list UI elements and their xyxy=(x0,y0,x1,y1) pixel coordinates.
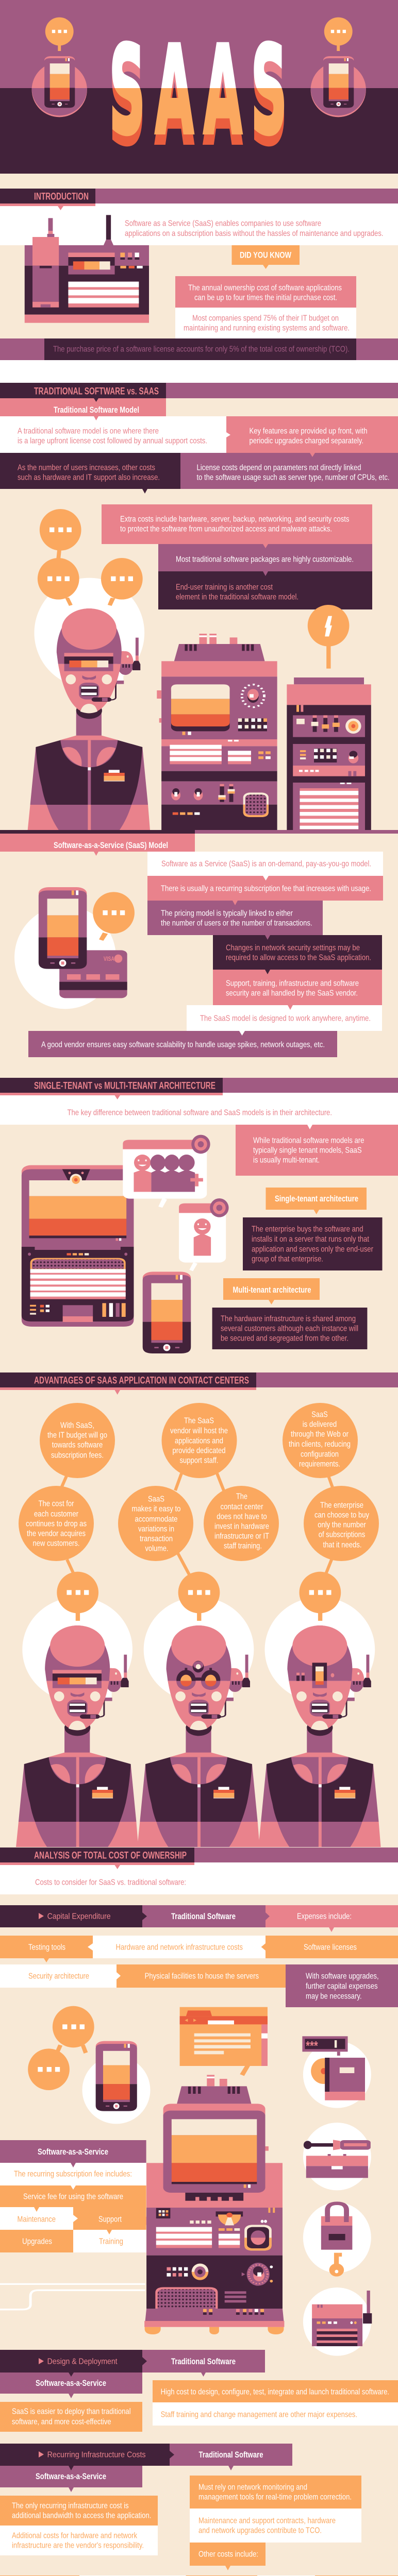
panel: recurring saas: Additional costs for hardware and network xyxy=(12,2532,138,2540)
subheading: traditional software model xyxy=(0,398,166,416)
advantage bubble 6: does not have to xyxy=(217,1513,267,1521)
label: multi-tenant architecture: Multi-tenant architecture xyxy=(233,1285,311,1295)
advantage bubble 1: With SaaS, xyxy=(60,1421,94,1430)
row: recurring infrastructure headers xyxy=(0,2444,292,2470)
section header: total cost of ownership: ANALYSIS OF TOTAL COST OF OWNERSHIP xyxy=(34,1851,187,1861)
icon: padlock and key xyxy=(303,2202,371,2277)
panel: design saas: Software-as-a-Service xyxy=(36,2378,106,2388)
intro line: costs to consider: Costs to consider for SaaS vs. traditional software: xyxy=(35,1878,186,1887)
illustration: three contact-center agents xyxy=(16,1572,381,1847)
text panel: extra costs: Extra costs include hardware, server, backup, networking, and security costs xyxy=(120,515,350,523)
panel: design saas: software, and more cost-effective xyxy=(12,2417,111,2427)
row: design and deployment headers: Traditional Software xyxy=(171,2357,236,2366)
step: network security xyxy=(213,935,382,970)
advantage bubble 6: contact center xyxy=(221,1502,263,1512)
text panel: key features: periodic upgrades charged separately. xyxy=(250,437,363,445)
text panel: other costs xyxy=(0,453,180,494)
step: scalability xyxy=(28,1031,337,1057)
row: security and facilities: Physical facilities to house the servers xyxy=(145,1972,259,1980)
icon: right phone with speech bubble xyxy=(311,18,366,117)
panel: design saas: SaaS is easier to deploy than traditional xyxy=(12,2407,131,2416)
advantage bubble 4: the vendor acquires xyxy=(27,1529,86,1538)
advantage bubble 7: only the number xyxy=(318,1521,366,1529)
advantage bubble 4 xyxy=(19,1486,94,1561)
title: SAAS xyxy=(109,31,287,172)
text panel: customizable: Most traditional software packages are highly customizable. xyxy=(176,555,354,564)
text panel: single-tenant: application and serves only the end-user xyxy=(252,1245,374,1254)
section header: traditional software vs saas xyxy=(0,383,398,398)
row: recurring infrastructure headers: Recurring Infrastructure Costs xyxy=(47,2450,146,2460)
panel: recurring traditional: management tools for real-time problem correction. xyxy=(198,2493,352,2502)
icon: tenant phone xyxy=(143,1272,191,1353)
advantage bubble 3: requirements. xyxy=(299,1460,340,1468)
advantage bubble 5: SaaS xyxy=(148,1495,164,1503)
panel: recurring traditional xyxy=(190,2476,361,2570)
advantage bubble 1: subscription fees. xyxy=(51,1451,104,1460)
advantage bubble 4: new customers. xyxy=(33,1539,79,1548)
text panel: single-tenant: group of that enterprise. xyxy=(252,1255,323,1263)
advantage bubble 3 xyxy=(283,1403,358,1478)
illustration: factory machine xyxy=(25,215,149,323)
panel: saas recurring fee: The recurring subscription fee includes: xyxy=(14,2170,132,2178)
advantage bubble 3: configuration xyxy=(301,1450,339,1459)
advantage bubble 5: variations in xyxy=(138,1525,174,1533)
section header: advantages xyxy=(0,1372,398,1395)
advantage bubble 2: support staff. xyxy=(179,1456,219,1465)
step: recurring fee xyxy=(147,876,383,901)
advantage bubble 5 xyxy=(118,1486,193,1561)
panel: saas recurring fee xyxy=(0,2140,146,2252)
step: pricing model: the number of users or the number of transactions. xyxy=(161,919,312,927)
row: capital expenditure headers: Traditional Software xyxy=(171,1911,236,1921)
icon: left phone with speech bubble xyxy=(32,18,87,117)
subheading: traditional software model: Traditional Software Model xyxy=(54,405,139,415)
label: multi-tenant architecture xyxy=(223,1278,320,1304)
advantage bubble 4: each customer xyxy=(34,1510,79,1519)
step: pricing model xyxy=(147,901,323,935)
panel: recurring saas: Software-as-a-Service xyxy=(36,2471,106,2481)
advantage bubble 7: can choose to buy xyxy=(314,1511,369,1520)
advantage bubble 7: The enterprise xyxy=(320,1501,363,1510)
icon: single-tenant window xyxy=(179,1198,229,1271)
fact: IT budget: maintaining and running existing systems and software. xyxy=(184,324,350,333)
text panel: traditional definition xyxy=(0,416,226,453)
text panel: software upgrades xyxy=(286,1964,398,2007)
floor line xyxy=(0,830,398,834)
panel: recurring traditional: Must rely on network monitoring and xyxy=(198,2483,307,2492)
section header: single vs multi tenant: SINGLE-TENANT vs MULTI-TENANT ARCHITECTURE xyxy=(34,1081,215,1091)
text panel: training xyxy=(158,571,372,609)
text panel: multi-tenant xyxy=(212,1308,367,1349)
advantage bubble 6: invest in hardware xyxy=(214,1522,269,1531)
text panel: multi-tenant note: typically single tenant models, SaaS xyxy=(253,1146,362,1155)
text panel: single-tenant: installs it on a server that runs only that xyxy=(252,1235,369,1244)
advantage bubble 2: The SaaS xyxy=(184,1417,214,1425)
text panel: software upgrades: With software upgrades, xyxy=(306,1972,379,1980)
panel: recurring saas: additional bandwidth to access the application. xyxy=(12,2511,151,2520)
panel: design traditional: Staff training and change management are other major expenses. xyxy=(161,2410,357,2419)
text panel: multi-tenant note xyxy=(236,1125,398,1176)
text panel: multi-tenant: be secured and segregated from the other. xyxy=(221,1334,349,1343)
subheading: saas model: Software-as-a-Service (SaaS) Model xyxy=(54,840,168,850)
advantage bubble 5: volume. xyxy=(145,1545,168,1553)
callout: did you know: DID YOU KNOW xyxy=(240,250,292,260)
text panel: extra costs xyxy=(102,504,372,544)
panel: design traditional xyxy=(153,2380,398,2426)
label: single-tenant architecture: Single-tenant architecture xyxy=(275,1194,358,1204)
text panel: single-tenant xyxy=(243,1217,383,1270)
step: support: security are all handled by the SaaS vendor. xyxy=(226,989,358,997)
row: capital expenditure headers xyxy=(0,1905,398,1932)
advantage bubble 1 xyxy=(40,1403,115,1478)
advantage bubble 2 xyxy=(162,1403,237,1478)
panel: saas recurring fee: Upgrades xyxy=(22,2237,52,2246)
text panel: other costs: such as hardware and IT support also increase. xyxy=(18,473,160,482)
advantage bubble 6 xyxy=(204,1486,279,1561)
advantage bubble 3: thin clients, reducing xyxy=(289,1440,351,1449)
panel: design saas xyxy=(0,2372,142,2432)
text panel: software upgrades: may be necessary. xyxy=(306,1992,362,2001)
step: support: Support, training, infrastructure and software xyxy=(226,979,359,988)
illustration: server rack with power bubble xyxy=(287,605,371,830)
fact: purchase price band xyxy=(0,338,398,360)
row: capital expense items: Software licenses xyxy=(304,1943,357,1952)
advantage bubble 2: applications and xyxy=(175,1436,223,1446)
text panel: multi-tenant: The hardware infrastructure is shared among xyxy=(221,1315,356,1323)
fact: annual ownership cost: The annual ownership cost of software applications xyxy=(188,283,342,293)
password characters: *** xyxy=(306,2039,318,2053)
illustration: tablet device xyxy=(22,1165,134,1327)
illustration: central mainframe xyxy=(0,2075,284,2334)
text panel: license costs xyxy=(180,453,398,489)
panel: saas recurring fee: Service fee for using the software xyxy=(23,2193,123,2201)
text panel: other costs: As the number of users increases, other costs xyxy=(18,464,155,472)
title: SAAS xyxy=(109,21,287,161)
fact: IT budget xyxy=(175,308,356,338)
text panel: key features xyxy=(226,416,398,457)
section header: total cost of ownership xyxy=(0,1848,398,1894)
panel: recurring saas: The only recurring infrastructure cost is xyxy=(12,2502,129,2510)
advantage bubble 2: vendor will host the xyxy=(170,1427,228,1435)
panel: recurring traditional: Maintenance and support contracts, hardware xyxy=(198,2516,336,2526)
fact: annual ownership cost: can be up to four times the initial purchase cost. xyxy=(194,294,337,302)
advantage bubble 4: The cost for xyxy=(38,1499,74,1509)
subheading: saas model xyxy=(0,834,195,856)
icon: multi-tenant window xyxy=(123,1135,210,1208)
row: capital expense items: Testing tools xyxy=(28,1943,65,1952)
agent 1: visor xyxy=(16,1572,138,1847)
agent 3: mini screen xyxy=(258,1572,381,1847)
row: capital expense items xyxy=(0,1936,398,1962)
panel: recurring saas xyxy=(0,2466,158,2555)
row: security and facilities: Security architecture xyxy=(28,1972,89,1980)
fact: annual ownership cost xyxy=(175,276,356,308)
panel: saas recurring fee: Training xyxy=(99,2237,123,2246)
intro text: Software as a Service (SaaS) enables companies to use software xyxy=(125,219,321,228)
section header: introduction xyxy=(0,189,398,245)
text panel: software upgrades: further capital expenses xyxy=(306,1982,378,1991)
step: anywhere xyxy=(187,1005,382,1031)
text panel: multi-tenant note: is usually multi-tenant. xyxy=(253,1156,320,1164)
step: pricing model: The pricing model is typically linked to either xyxy=(161,909,293,918)
advantage bubble 7: of subscriptions xyxy=(319,1530,365,1539)
panel: recurring traditional: and network upgrades contribute to TCO. xyxy=(198,2527,322,2535)
panel: saas recurring fee: Maintenance xyxy=(18,2215,56,2224)
step: scalability: A good vendor ensures easy software scalability to handle usage spikes, network outages, etc. xyxy=(41,1041,325,1049)
agent 2: goggles xyxy=(137,1572,260,1847)
row: security and facilities xyxy=(0,1964,286,1988)
fact: IT budget: Most companies spend 75% of their IT budget on xyxy=(192,314,339,323)
text panel: key features: Key features are provided up front, with xyxy=(250,427,367,436)
text panel: training: element in the traditional software model. xyxy=(176,592,299,602)
advantage bubble 5: accommodate xyxy=(135,1515,178,1524)
row: recurring infrastructure headers: Traditional Software xyxy=(199,2450,263,2460)
step: support xyxy=(213,970,382,1005)
text panel: customizable xyxy=(158,544,372,571)
illustration: phone and bubbles xyxy=(28,2006,150,2124)
row: other costs items xyxy=(0,2575,398,2576)
text panel: multi-tenant: several customers although each instance will xyxy=(221,1324,358,1333)
advantage bubble 5: makes it easy to xyxy=(132,1504,181,1514)
icon: network router xyxy=(303,2287,372,2356)
advantage bubble 3: through the Web or xyxy=(291,1430,349,1438)
row: capital expense items: Hardware and network infrastructure costs xyxy=(115,1943,243,1952)
section header: traditional software vs saas: TRADITIONAL SOFTWARE vs. SAAS xyxy=(34,386,159,397)
step: on-demand xyxy=(147,852,383,876)
advantage bubble 1: the IT budget will go xyxy=(47,1431,107,1439)
advantage bubble 2: provide dedicated xyxy=(172,1447,226,1455)
section header: introduction: INTRODUCTION xyxy=(34,192,89,202)
illustration: phone and credit card xyxy=(14,887,135,1009)
hero banner xyxy=(0,0,398,174)
illustration: operator with speech bubbles xyxy=(28,509,150,830)
advantage bubble 6: The xyxy=(236,1492,247,1501)
label: single-tenant architecture xyxy=(266,1188,367,1214)
text panel: traditional definition: A traditional software model is one where there xyxy=(18,427,159,436)
text panel: extra costs: to protect the software from unauthorized access and malware attacks. xyxy=(120,524,332,534)
text panel: single-tenant: The enterprise buys the software and xyxy=(252,1225,363,1233)
text panel: traditional definition: is a large upfront license cost followed by annual support costs. xyxy=(18,437,207,445)
panel: recurring saas: infrastructure are the vendor's responsibility. xyxy=(12,2541,144,2550)
panel: saas recurring fee: Support xyxy=(98,2215,122,2224)
advantage bubble 3: is delivered xyxy=(303,1420,337,1429)
step: network security: Changes in network security settings may be xyxy=(226,944,360,952)
illustration: browser window xyxy=(180,2007,268,2076)
advantage bubble 7: that it needs. xyxy=(323,1540,362,1550)
panel: recurring traditional: Other costs include: xyxy=(198,2550,258,2558)
row: design and deployment headers xyxy=(0,2350,265,2377)
intro text xyxy=(125,219,384,238)
icon: toolbox and screwdriver xyxy=(303,2123,371,2190)
advantage bubble 3: SaaS xyxy=(311,1411,328,1419)
text panel: training: End-user training is another cost xyxy=(176,583,273,591)
text panel: multi-tenant note: While traditional software models are xyxy=(253,1137,364,1145)
advantage bubble 5: transaction xyxy=(140,1534,173,1544)
connectors between advantage bubbles xyxy=(61,1473,333,1575)
text panel: license costs: License costs depend on parameters not directly linked xyxy=(197,464,361,472)
advantage bubble 4: continues to drop as xyxy=(26,1520,87,1528)
advantage bubble 6: infrastructure or IT xyxy=(214,1532,269,1540)
advantage bubble 1: towards software xyxy=(52,1440,103,1450)
section header: advantages: ADVANTAGES OF SAAS APPLICATION IN CONTACT CENTERS xyxy=(34,1376,249,1386)
panel: saas recurring fee: Software-as-a-Service xyxy=(38,2147,108,2157)
callout: did you know xyxy=(232,245,300,269)
card logo text: VISA xyxy=(104,956,114,962)
row: design and deployment headers: Design & Deployment xyxy=(47,2358,118,2366)
illustration: control console xyxy=(157,634,277,830)
row: capital expenditure headers: Expenses include: xyxy=(297,1912,352,1921)
icon: password and book xyxy=(302,2036,371,2108)
row: capital expenditure headers: Capital Expenditure xyxy=(47,1912,111,1921)
advantage bubble 6: staff training. xyxy=(224,1541,262,1551)
section header: single vs multi tenant xyxy=(0,1078,398,1125)
text steps: saas model xyxy=(28,852,383,1057)
intro line: architecture: The key difference between traditional software and SaaS models is in their architecture. xyxy=(67,1109,332,1117)
advantage bubble 7 xyxy=(304,1486,379,1561)
